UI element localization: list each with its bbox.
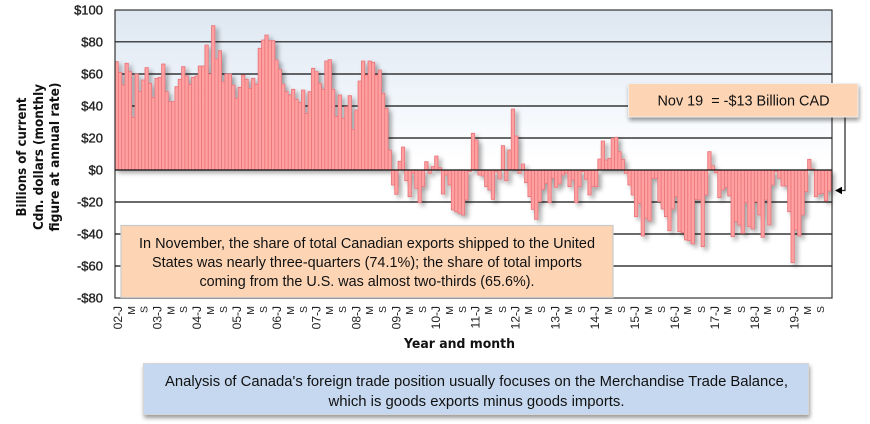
x-axis tick labels: 18-J	[748, 306, 762, 329]
x-axis tick labels	[111, 306, 827, 329]
x-axis tick labels: M	[603, 306, 615, 315]
arrow: callout to Nov 19 value	[835, 117, 845, 194]
x-axis tick labels: S	[417, 306, 429, 313]
x-axis tick labels: S	[258, 306, 270, 313]
callout: share of exports and imports	[121, 226, 613, 298]
x-axis tick labels: 16-J	[668, 306, 682, 329]
y-axis title: Billions of current	[14, 97, 30, 216]
x-axis tick labels: 04-J	[190, 306, 204, 329]
y-axis tick labels: -$60	[77, 258, 103, 274]
x-axis tick labels: M	[802, 306, 814, 315]
x-axis tick labels: M	[682, 306, 694, 315]
x-axis tick labels: S	[377, 306, 389, 313]
x-axis tick labels: S	[337, 306, 349, 313]
x-axis tick labels: 07-J	[310, 306, 324, 329]
x-axis tick labels: S	[298, 306, 310, 313]
x-axis tick labels: M	[166, 306, 178, 315]
x-axis tick labels: S	[576, 306, 588, 313]
y-axis tick labels	[74, 2, 103, 306]
x-axis tick labels: S	[775, 306, 787, 313]
y-axis tick labels: $0	[89, 162, 103, 178]
x-axis tick labels: S	[218, 306, 230, 313]
x-axis tick labels: M	[483, 306, 495, 315]
x-axis tick labels: 02-J	[111, 306, 125, 329]
x-axis tick labels: 06-J	[270, 306, 284, 329]
x-axis tick labels: M	[245, 306, 257, 315]
x-axis tick labels: S	[457, 306, 469, 313]
x-axis tick labels: M	[126, 306, 138, 315]
x-axis tick labels: 17-J	[708, 306, 722, 329]
x-axis tick labels: M	[285, 306, 297, 315]
x-axis tick labels: 15-J	[628, 306, 642, 329]
x-axis tick labels: 12-J	[508, 306, 522, 329]
x-axis tick labels: S	[815, 306, 827, 313]
y-axis tick labels: $80	[81, 34, 103, 50]
x-axis tick labels: S	[138, 306, 150, 313]
callout: analysis note: which is goods exports minus goods imports.	[327, 394, 624, 410]
x-axis tick labels: 03-J	[150, 306, 164, 329]
x-axis tick labels: M	[643, 306, 655, 315]
x-axis tick labels: S	[656, 306, 668, 313]
y-axis tick labels: $60	[81, 66, 103, 82]
x-axis tick labels: S	[178, 306, 190, 313]
callout: analysis note: Analysis of Canada's foreign trade position usually focuses on the Merchandise Trade Balance,	[165, 374, 788, 390]
x-axis tick labels: 11-J	[468, 306, 482, 328]
x-axis tick labels: 08-J	[350, 306, 364, 329]
y-axis tick labels: $20	[81, 130, 103, 146]
y-axis tick labels: $100	[74, 2, 103, 18]
chart: merchandise trade balance	[115, 10, 832, 298]
plot background	[115, 10, 832, 298]
x-axis tick labels: M	[205, 306, 217, 315]
x-axis tick labels: S	[536, 306, 548, 313]
y-axis tick labels: -$20	[77, 194, 103, 210]
x-axis tick labels: 09-J	[390, 306, 404, 329]
x-axis tick labels: S	[696, 306, 708, 313]
y-axis title	[14, 82, 63, 232]
callout: share of exports and imports: coming from the U.S. was almost two-thirds (65.6%).	[200, 274, 534, 290]
callout: share of exports and imports: In November, the share of total Canadian exports shipped to the United	[139, 236, 595, 252]
y-axis tick labels: $40	[81, 98, 103, 114]
x-axis tick labels: 10-J	[429, 306, 443, 329]
x-axis tick labels: S	[736, 306, 748, 313]
callout: Nov 19 value: Nov 19 = -$13 Billion CAD	[658, 94, 830, 110]
x-axis tick labels: 05-J	[230, 306, 244, 329]
x-axis tick labels: M	[523, 306, 535, 315]
y-axis tick labels: -$40	[77, 226, 103, 242]
callout: analysis note	[144, 364, 808, 414]
callout: share of exports and imports: States was nearly three-quarters (74.1%); the share of total imports	[152, 255, 582, 271]
x-axis tick labels: M	[324, 306, 336, 315]
x-axis tick labels: 13-J	[548, 306, 562, 329]
x-axis tick labels: M	[444, 306, 456, 315]
x-axis tick labels: M	[563, 306, 575, 315]
y-axis title: Cdn. dollars (monthly	[31, 84, 47, 230]
x-axis tick labels: 19-J	[788, 306, 802, 329]
y-axis title: figure at annual rate)	[47, 82, 63, 232]
monthly bars	[115, 26, 831, 263]
x-axis title: Year and month	[403, 337, 515, 352]
x-axis tick labels: S	[497, 306, 509, 313]
x-axis tick labels: S	[616, 306, 628, 313]
x-axis tick labels: 14-J	[588, 306, 602, 329]
x-axis tick labels: M	[762, 306, 774, 315]
x-axis tick labels: M	[722, 306, 734, 315]
y-axis tick labels: -$80	[77, 290, 103, 306]
x-axis tick labels: M	[364, 306, 376, 315]
callout: Nov 19 value	[628, 84, 858, 117]
x-axis tick labels: M	[404, 306, 416, 315]
